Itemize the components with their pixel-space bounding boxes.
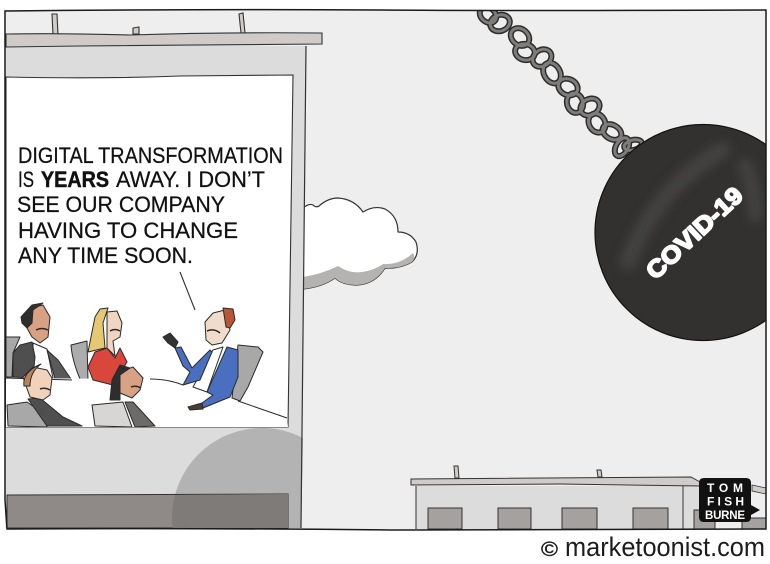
speech text: AWAY. I DON’T [116, 167, 265, 192]
far roof edge [752, 485, 766, 494]
chain [477, 4, 643, 159]
artist logo: TOM [707, 481, 743, 495]
tower shadow [172, 428, 303, 528]
ball brush texture [628, 150, 755, 262]
man top left [13, 303, 71, 379]
front left man [7, 364, 82, 427]
wrecking ball [595, 124, 770, 340]
front middle man [92, 365, 155, 427]
meeting scene [6, 303, 288, 427]
cloud [303, 198, 417, 289]
low building edges [416, 486, 683, 529]
roof slab [6, 33, 322, 47]
right chair [232, 345, 263, 401]
speech bubble tail [180, 272, 195, 310]
tower base band [7, 494, 288, 528]
low building windows [428, 508, 766, 529]
artist logo: BURNE [705, 510, 745, 522]
roof posts [52, 13, 245, 35]
speech text: YEARS [41, 167, 109, 192]
chain outline [477, 4, 643, 159]
artist logo: FISH [707, 494, 744, 508]
speech text: HAVING TO CHANGE [18, 218, 238, 243]
boardroom window [6, 75, 293, 427]
speech text: SEE OUR COMPANY [17, 192, 225, 217]
conference table [6, 378, 288, 427]
speaking man [163, 308, 238, 410]
tower wall [6, 46, 306, 528]
tower right edge [301, 46, 306, 528]
low building [411, 466, 766, 529]
speech text [17, 143, 283, 268]
low building wall [416, 486, 700, 529]
artist logo [699, 478, 760, 522]
table edge [6, 378, 287, 418]
office tower [6, 13, 322, 528]
ball label: COVID-19 [641, 182, 749, 285]
copyright credit: © [541, 539, 558, 561]
blonde woman [88, 308, 127, 385]
speech text: ANY TIME SOON. [18, 243, 193, 268]
low building posts [454, 466, 602, 478]
speech text: IS [18, 167, 34, 192]
speech text: DIGITAL TRANSFORMATION [18, 143, 283, 168]
low building roof [411, 477, 700, 486]
chain highlight [477, 4, 643, 159]
back left chair [6, 337, 20, 377]
back middle chair [71, 341, 88, 380]
